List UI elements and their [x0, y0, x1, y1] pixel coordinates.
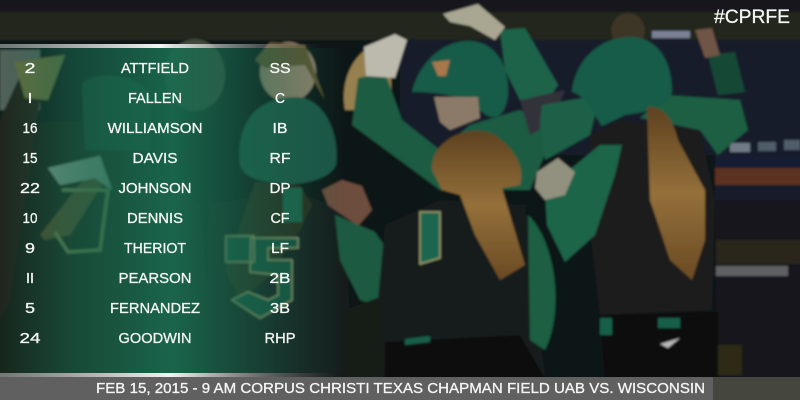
green lineup panel — [0, 48, 345, 373]
row: 1 Fallen C: I — [28, 90, 32, 107]
row: 2 Attfield SS — [24, 60, 290, 77]
row: 11 Pearson 2B: II — [26, 270, 34, 287]
row: 9 Theriot LF: THERIOT — [124, 240, 186, 257]
row: 22 Johnson DP: 22 — [20, 180, 40, 197]
row: 16 Williamson 1B — [22, 120, 288, 137]
row: 24 Goodwin RHP: 24 — [20, 330, 40, 347]
row: 22 Johnson DP: DP — [270, 180, 290, 197]
row: 16 Williamson 1B: IB — [272, 120, 288, 137]
row: 24 Goodwin RHP — [20, 330, 296, 347]
hashtag: #CPRFE — [714, 7, 790, 28]
row: 9 Theriot LF — [25, 240, 289, 257]
row: 10 Dennis CF: DENNIS — [127, 210, 183, 227]
lineup table — [20, 60, 296, 347]
row: 11 Pearson 2B — [26, 270, 290, 287]
row: 5 Fernandez 3B: 3B — [270, 300, 290, 317]
row: 1 Fallen C — [28, 90, 285, 107]
bottom panel highlight line — [0, 373, 340, 377]
row: 16 Williamson 1B: WILLIAMSON — [108, 120, 202, 137]
row: 9 Theriot LF: 9 — [25, 240, 35, 257]
green sleeve near center — [335, 215, 412, 378]
row: 5 Fernandez 3B — [25, 300, 290, 317]
row: 10 Dennis CF: CF — [270, 210, 290, 227]
row: 15 Davis RF: DAVIS — [132, 150, 178, 167]
row: 22 Johnson DP: JOHNSON — [118, 180, 192, 197]
top panel highlight line — [0, 44, 320, 48]
row: 10 Dennis CF — [22, 210, 290, 227]
center player with ponytail — [378, 131, 556, 378]
row: 24 Goodwin RHP: GOODWIN — [118, 330, 192, 347]
row: 16 Williamson 1B: 16 — [22, 120, 38, 137]
row: 1 Fallen C: FALLEN — [128, 90, 182, 107]
row: 15 Davis RF: 15 — [22, 150, 38, 167]
row: 9 Theriot LF: LF — [271, 240, 289, 257]
row: 10 Dennis CF: 10 — [22, 210, 38, 227]
row: 15 Davis RF: RF — [270, 150, 290, 167]
row: 22 Johnson DP — [20, 180, 290, 197]
row: 15 Davis RF — [22, 150, 290, 167]
background crowd — [0, 13, 645, 111]
center raised arm player — [352, 4, 565, 190]
row: 1 Fallen C: C — [275, 90, 285, 107]
row: 24 Goodwin RHP: RHP — [264, 330, 296, 347]
row: 2 Attfield SS: ATTFIELD — [121, 60, 189, 77]
row: 2 Attfield SS: 2 — [24, 60, 36, 77]
game details text: FEB 15, 2015 - 9 AM CORPUS CHRISTI TEXAS CHAPMAN FIELD UAB VS. WISCONSIN — [96, 380, 705, 397]
row: 5 Fernandez 3B: FERNANDEZ — [110, 300, 200, 317]
right player — [535, 28, 748, 377]
row: 11 Pearson 2B: PEARSON — [118, 270, 192, 287]
row: 2 Attfield SS: SS — [270, 60, 290, 77]
player number 15 helmet — [205, 97, 372, 380]
bottom info bar — [0, 377, 800, 400]
row: 5 Fernandez 3B: 5 — [25, 300, 35, 317]
row: 11 Pearson 2B: 2B — [270, 270, 290, 287]
left player — [0, 55, 215, 380]
